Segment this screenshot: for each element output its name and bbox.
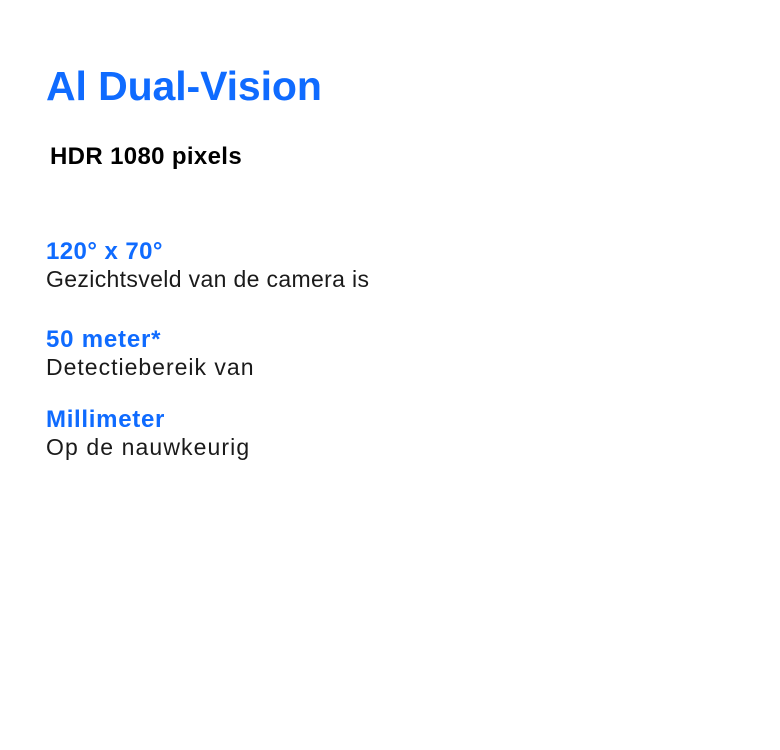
spec: field of view: [46, 238, 369, 292]
spec: field of view: 120° x 70°: [46, 238, 163, 265]
spec: detection range: Detectiebereik van: [46, 354, 254, 380]
spec: field of view: Gezichtsveld van de camera is: [46, 266, 369, 292]
spec: detection range: [46, 326, 254, 380]
subtitle: HDR 1080 pixels: [50, 143, 242, 170]
spec: precision: Millimeter: [46, 406, 165, 433]
spec: precision: Op de nauwkeurig: [46, 434, 250, 460]
title: Al Dual-Vision: [46, 63, 322, 109]
spec: precision: [46, 406, 250, 460]
spec: detection range: 50 meter*: [46, 326, 161, 353]
